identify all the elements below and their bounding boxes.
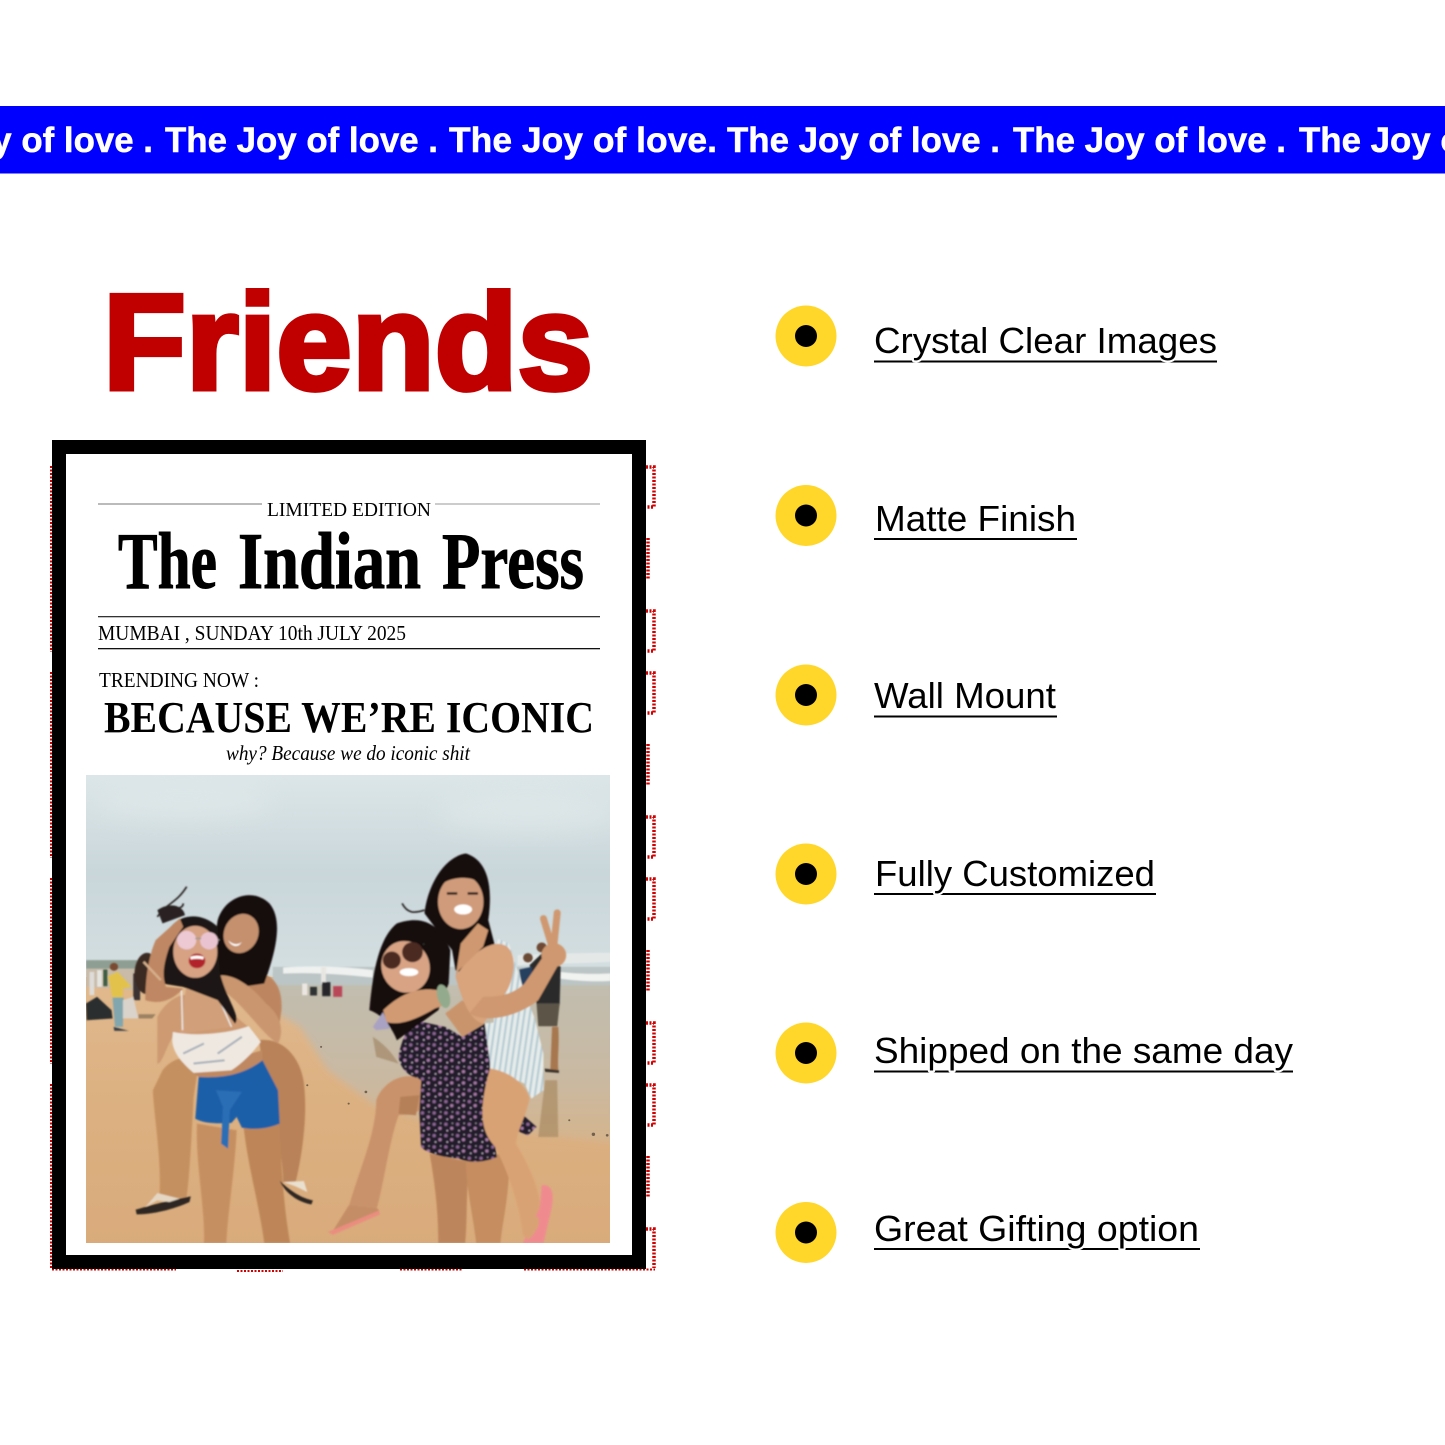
bullet icon — [776, 306, 836, 366]
standing friend's face — [375, 936, 436, 998]
man on the right — [373, 942, 561, 1137]
poster: framed newspaper — [59, 447, 639, 1262]
pink flip flop — [328, 1210, 380, 1235]
sand base — [80, 977, 618, 1250]
scrunchie — [434, 983, 453, 1009]
top friend's back and arm — [248, 974, 282, 1022]
ticker text: The Joy of love . — [1013, 121, 1286, 160]
poster frame — [59, 447, 639, 1262]
feature: Crystal Clear Images: Crystal Clear Images — [874, 320, 1217, 361]
sunglasses — [383, 951, 401, 969]
newspaper header — [98, 499, 600, 765]
bent leg — [482, 1069, 542, 1242]
standing friend's face — [173, 926, 217, 978]
feature: Shipped on the same day: Shipped on the same day — [874, 1030, 1293, 1071]
ticker text: The Joy of love. — [449, 121, 717, 160]
sea and foam — [86, 953, 618, 990]
feature: Wall Mount — [776, 664, 1057, 726]
torso — [157, 995, 252, 1064]
feature: Great Gifting option: Great Gifting option — [874, 1208, 1199, 1249]
photo: four friends on a beach — [80, 770, 618, 1250]
far leg of top friend — [259, 1040, 305, 1184]
wind-blown hair — [157, 887, 187, 917]
pink sunglasses — [177, 931, 196, 949]
masthead: The — [118, 518, 217, 606]
pink sandal — [523, 1185, 553, 1243]
bullet icon — [776, 485, 836, 546]
top friend's face — [222, 912, 260, 954]
hand at chin — [456, 923, 488, 977]
standing friend's legs — [430, 1154, 469, 1243]
raised arm — [145, 918, 183, 1002]
ticker text: The Joy of love . — [727, 121, 1000, 160]
top friend's hair — [424, 853, 495, 984]
midriff — [190, 1050, 262, 1077]
dotted red outline behind frame — [51, 466, 655, 1271]
trending label: TRENDING NOW : — [99, 668, 259, 692]
feature: Matte Finish: Matte Finish — [875, 498, 1076, 539]
friends: right pair — [328, 853, 566, 1243]
peace hand — [541, 943, 566, 967]
feature: Fully Customized — [776, 844, 1156, 904]
sky — [80, 770, 618, 977]
bullet icon — [776, 664, 836, 726]
chest — [445, 1000, 485, 1037]
feature: Shipped on the same day — [776, 1022, 1293, 1084]
standing friend's legs — [197, 1124, 237, 1243]
ticker text: The Joy of love . — [165, 121, 438, 160]
standing friend's hair — [159, 916, 237, 1024]
laughing mouth — [189, 953, 205, 968]
flip flops — [136, 1196, 191, 1214]
white ruffle top — [172, 1026, 261, 1073]
standing friend's hair — [369, 920, 450, 1040]
wet sand — [273, 977, 618, 1144]
top friend's face — [438, 874, 483, 929]
denim shorts — [195, 1060, 280, 1129]
feature: Wall Mount: Wall Mount — [874, 675, 1056, 716]
title: Friends: Friends — [103, 266, 593, 418]
masthead — [118, 518, 584, 606]
masthead: Press — [442, 518, 584, 606]
feature: Matte Finish — [776, 485, 1077, 546]
date line: MUMBAI , SUNDAY 10th JULY 2025 — [98, 621, 406, 645]
dangling leg — [349, 1076, 421, 1210]
bullet icon — [776, 1022, 836, 1084]
floral dress — [399, 1020, 497, 1162]
feature: Crystal Clear Images — [776, 306, 1217, 366]
hugging arm — [383, 989, 449, 1023]
friends: left pair — [135, 887, 313, 1243]
smile — [400, 968, 418, 976]
feature list — [776, 306, 1293, 1263]
bullet icon — [776, 1202, 836, 1263]
ticker text — [0, 126, 1445, 160]
striped dress — [483, 1019, 543, 1099]
banner: scrolling ticker — [0, 106, 1445, 174]
headline: BECAUSE WE’RE ICONIC — [104, 693, 594, 742]
sand specks — [306, 1046, 609, 1137]
bullet icon — [776, 844, 836, 904]
masthead: Indian — [238, 518, 421, 606]
near leg of top friend — [153, 1058, 199, 1200]
top friend's hair — [216, 895, 277, 987]
subheadline: why? Because we do iconic shit — [226, 741, 471, 765]
feature: Fully Customized: Fully Customized — [875, 853, 1155, 894]
feature: Great Gifting option — [776, 1202, 1200, 1263]
top friend's body and arms — [456, 944, 514, 1024]
distant people, centre — [302, 967, 342, 997]
distant people, left — [86, 963, 156, 1031]
edition line: LIMITED EDITION — [267, 499, 431, 521]
